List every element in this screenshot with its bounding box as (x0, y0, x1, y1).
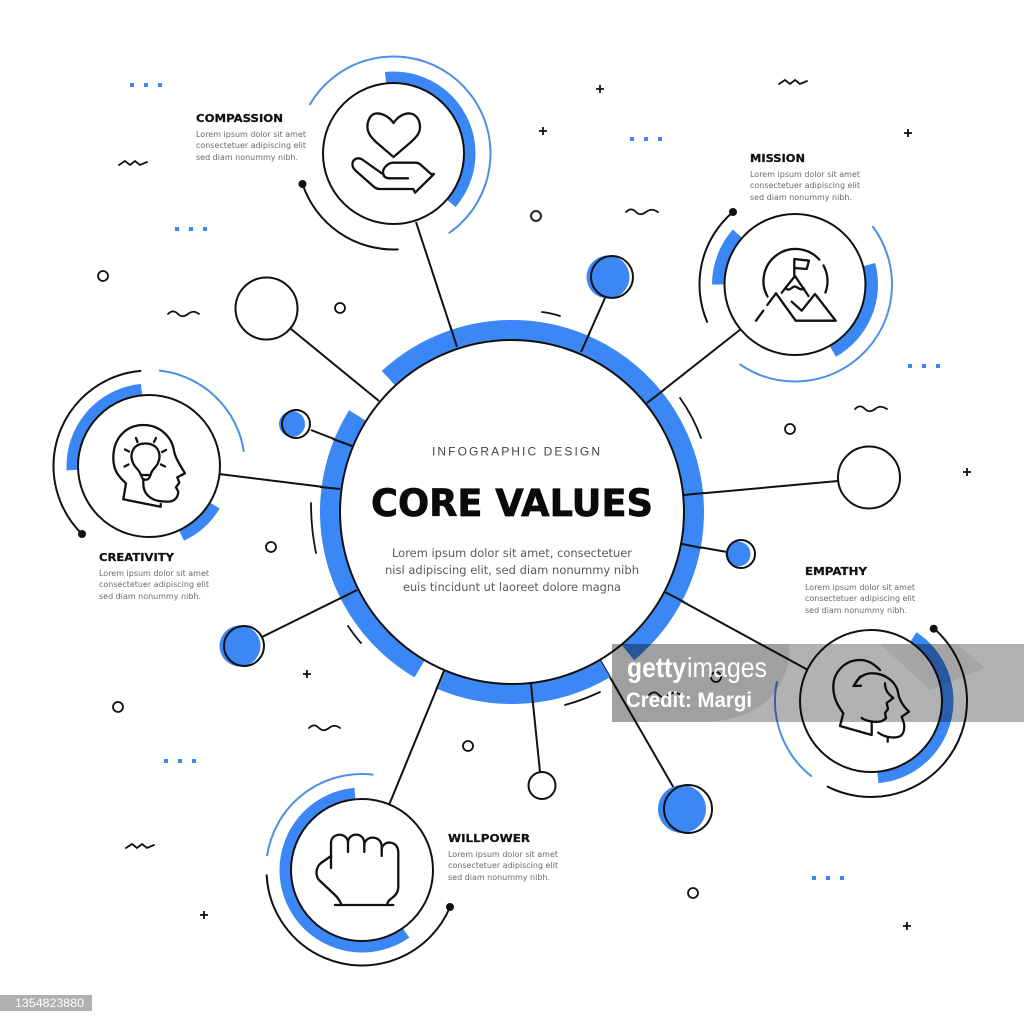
text: empathy: Lorem ipsum dolor sit amet (805, 583, 915, 592)
node: creativity (14, 331, 284, 601)
text: empathy: sed diam nonummy nibh. (805, 606, 907, 615)
text: compassion: COMPASSION (196, 112, 283, 125)
satellite circles (220, 256, 900, 833)
subtitle: INFOGRAPHIC DESIGN (432, 444, 600, 458)
image id tag: 1354823880 (15, 998, 84, 1010)
text: mission (750, 152, 860, 202)
text: willpower: WILLPOWER (448, 832, 531, 845)
text: compassion (196, 112, 306, 162)
centre description: Lorem ipsum dolor sit amet, consectetuer (392, 546, 632, 560)
watermark band: images (687, 652, 767, 683)
text: mission: MISSION (750, 152, 805, 165)
centre description (385, 546, 639, 594)
text: willpower: Lorem ipsum dolor sit amet (448, 850, 558, 859)
text: empathy: EMPATHY (805, 565, 868, 578)
watermark logo text: getty (627, 652, 686, 683)
text: willpower (448, 832, 558, 882)
text: creativity: CREATIVITY (99, 551, 175, 564)
text: mission: consectetuer adipiscing elit (750, 181, 860, 190)
icon: mountain with flag (756, 249, 836, 321)
spoke overlay on ring (320, 325, 704, 704)
central blue ring segments (255, 255, 769, 769)
node: compassion (261, 21, 526, 286)
text: creativity: sed diam nonummy nibh. (99, 592, 201, 601)
text: creativity (99, 551, 209, 601)
watermark credit: Credit: Margi (626, 689, 752, 712)
central circle with text (340, 340, 684, 684)
image id tag (0, 995, 92, 1011)
node: willpower (237, 745, 487, 995)
text: empathy: consectetuer adipiscing elit (805, 594, 915, 603)
icon: head with lightbulb (113, 425, 185, 507)
text: willpower: consectetuer adipiscing elit (448, 861, 558, 870)
centre description: nisl adipiscing elit, sed diam nonummy nibh (385, 563, 639, 577)
text: compassion: consectetuer adipiscing elit (196, 141, 306, 150)
watermark band (612, 644, 1024, 722)
text: mission: Lorem ipsum dolor sit amet (750, 170, 860, 179)
background confetti: blue dots, squiggles, plus signs, small circles (98, 80, 971, 930)
text: creativity: consectetuer adipiscing elit (99, 580, 209, 589)
text: creativity: Lorem ipsum dolor sit amet (99, 569, 209, 578)
text: empathy (805, 565, 915, 615)
icon: heart in hand (352, 113, 434, 193)
spokes connecting centre to nodes (219, 222, 838, 805)
centre description: euis tincidunt ut laoreet dolore magna (403, 580, 621, 594)
title: CORE VALUES (371, 481, 653, 525)
icon: two heads with arrow (833, 660, 909, 742)
text: mission: sed diam nonummy nibh. (750, 193, 852, 202)
text: compassion: sed diam nonummy nibh. (196, 153, 298, 162)
icon: raised fist (317, 835, 398, 905)
text: compassion: Lorem ipsum dolor sit amet (196, 130, 306, 139)
node: mission (659, 149, 931, 420)
node: empathy (736, 566, 1006, 836)
text: willpower: sed diam nonummy nibh. (448, 873, 550, 882)
